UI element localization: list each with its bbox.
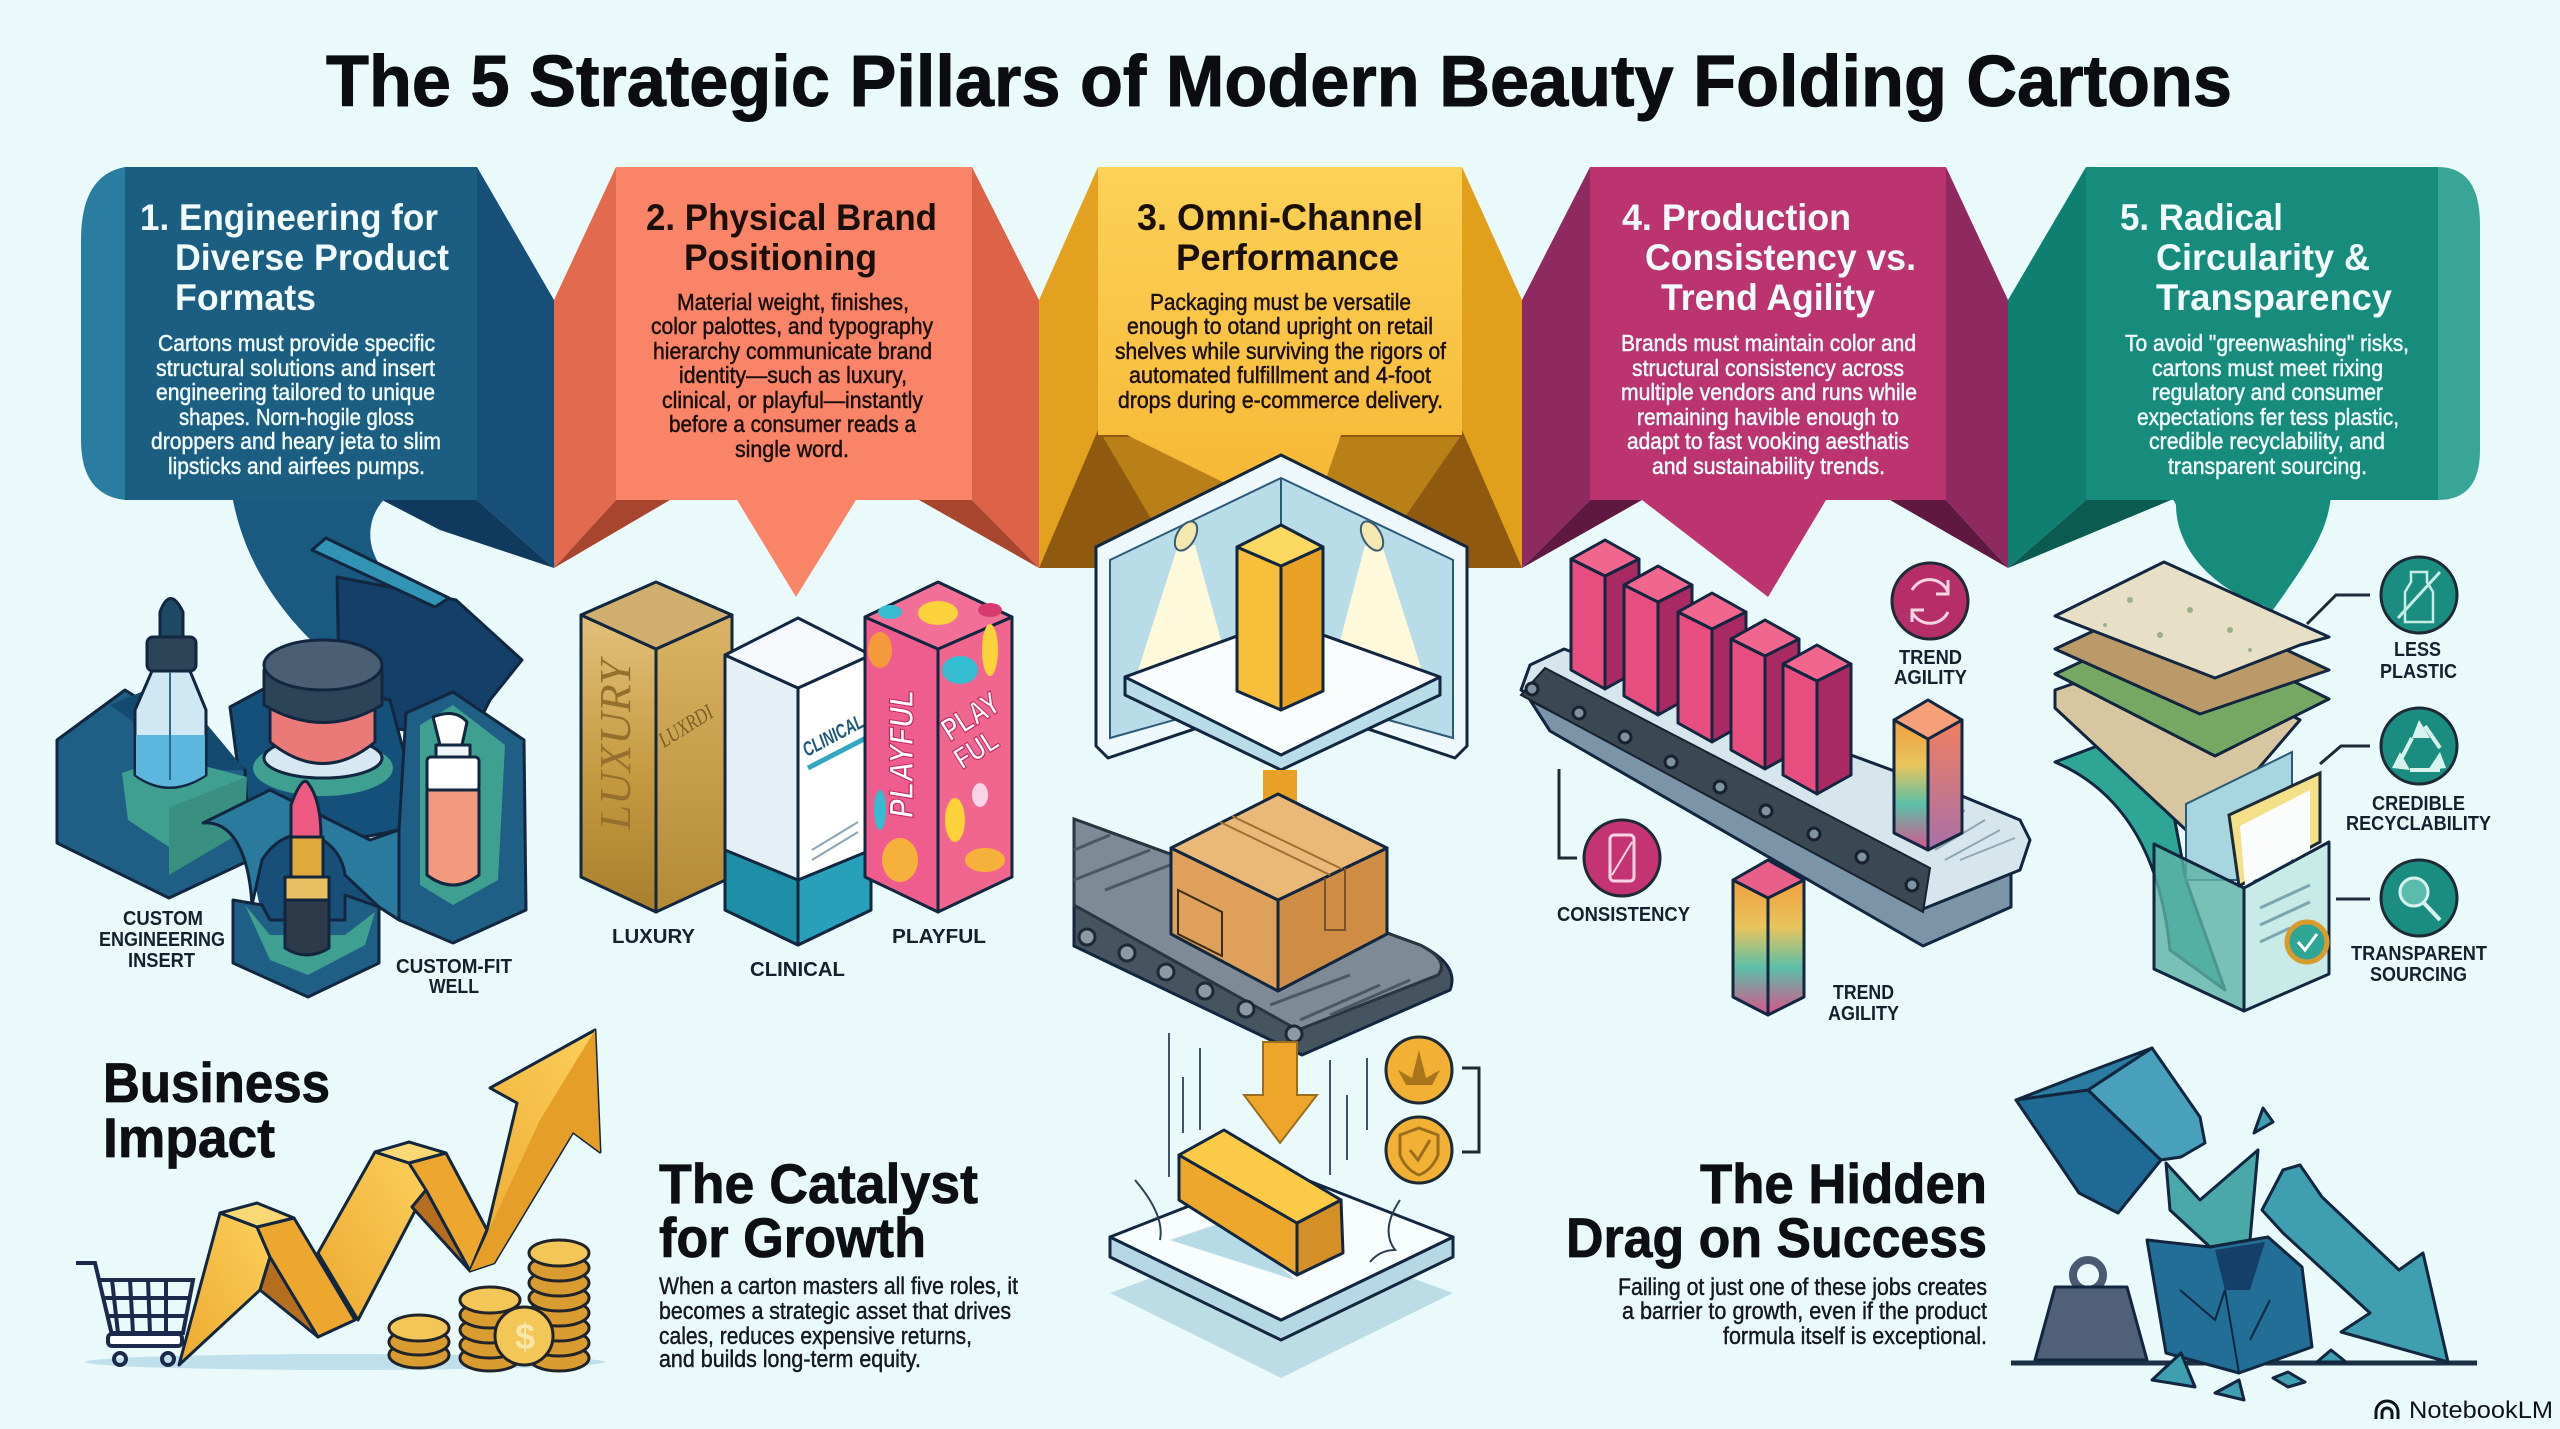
heading: the hidden drag on success: Drag on Success bbox=[1566, 1206, 1987, 1269]
gradient carton on belt bbox=[1894, 700, 1962, 850]
illustration: clinical box: CLINICAL bbox=[799, 711, 868, 761]
illustration: luxury box: LUXRDI bbox=[653, 699, 719, 753]
panel: pillar 4 production consistency: Trend Agility bbox=[1661, 277, 1875, 318]
label: trend agility bottom: TREND bbox=[1833, 982, 1894, 1004]
text block: catalyst description bbox=[659, 1273, 1018, 1373]
panel: pillar 2 brand positioning bbox=[554, 167, 1039, 597]
label: less plastic bbox=[2380, 639, 2457, 683]
panel: pillar 5 radical circularity: Transparency bbox=[2156, 277, 2392, 318]
text block: catalyst description: When a carton masters all five roles, it bbox=[659, 1273, 1018, 1300]
label: custom-fit well bbox=[396, 956, 512, 998]
panel: pillar 3 omni-channel: enough to otand upright on retail bbox=[1127, 313, 1433, 339]
text block: hidden drag description: Failing ot just one of these jobs creates bbox=[1618, 1274, 1987, 1301]
panel: pillar 1 engineering: Cartons must provide specific bbox=[158, 330, 435, 356]
panel: pillar 5 radical circularity: 5. Radical bbox=[2120, 197, 2283, 238]
label: custom engineering insert: ENGINEERING bbox=[99, 929, 225, 951]
panel: pillar 1 engineering: engineering tailored to unique bbox=[156, 379, 435, 405]
heading: the hidden drag on success bbox=[1566, 1152, 1987, 1269]
icon: coin stacks bbox=[389, 1240, 589, 1371]
label: consistency: CONSISTENCY bbox=[1557, 904, 1691, 926]
label: transparent sourcing bbox=[2351, 943, 2487, 986]
labels: box styles: CLINICAL bbox=[750, 959, 845, 981]
illustration: playful box: PLAYFUL bbox=[883, 690, 921, 818]
panel: pillar 3 omni-channel: 3. Omni-Channel bbox=[1137, 197, 1423, 238]
panel: pillar 1 engineering: structural solutions and insert bbox=[156, 355, 435, 381]
icon: trend agility badge bbox=[1892, 563, 1968, 639]
panel: pillar 2 brand positioning: identity—such as luxury, bbox=[679, 362, 907, 388]
icon: weight bbox=[2035, 1260, 2147, 1360]
icon: recyclability badge bbox=[2320, 708, 2457, 784]
illustration: consistency conveyor with pink cartons bbox=[1521, 540, 2030, 946]
panel: pillar 2 brand positioning: before a consumer reads a bbox=[669, 411, 917, 437]
label: custom-fit well: CUSTOM-FIT bbox=[396, 956, 512, 978]
panel: pillar 1 engineering: lipsticks and airfees pumps. bbox=[168, 453, 425, 479]
panel: pillar 2 brand positioning: single word. bbox=[735, 436, 849, 462]
illustration: material layers and transparency folder bbox=[2055, 562, 2329, 1011]
panel: pillar 3 omni-channel: shelves while surviving the rigors of bbox=[1115, 338, 1446, 364]
panel: pillar 4 production consistency bbox=[1522, 167, 2008, 597]
panel: pillar 5 radical circularity: transparent sourcing. bbox=[2168, 453, 2367, 479]
label: credible recyclability: CREDIBLE bbox=[2372, 793, 2465, 815]
heading: the catalyst for growth: The Catalyst bbox=[659, 1152, 978, 1215]
panel: pillar 1 engineering: droppers and heary jeta to slim bbox=[151, 428, 441, 454]
label: trend agility top: TREND bbox=[1899, 647, 1962, 669]
label: custom-fit well: WELL bbox=[429, 976, 479, 998]
illustration: broken arrow and weight bbox=[2011, 1048, 2477, 1400]
heading: business impact bbox=[103, 1051, 330, 1169]
title: The 5 Strategic Pillars of Modern Beauty Folding Cartons bbox=[326, 42, 2232, 122]
panel: pillar 4 production consistency: adapt to fast vooking aesthatis bbox=[1627, 428, 1909, 454]
illustration: growth arrow with cart and coins: $ bbox=[515, 1316, 535, 1357]
panel: pillar 5 radical circularity bbox=[2008, 167, 2480, 610]
illustration: luxury box: LUXURY bbox=[591, 655, 640, 831]
icon: dropper bottle bbox=[135, 598, 206, 788]
panel: pillar 1 engineering bbox=[81, 167, 554, 665]
panel: pillar 4 production consistency: and sustainability trends. bbox=[1652, 453, 1885, 479]
panel: pillar 5 radical circularity: expectations fer tess plastic, bbox=[2137, 404, 2399, 430]
panel: pillar 3 omni-channel: Performance bbox=[1176, 237, 1399, 278]
labels: box styles: PLAYFUL bbox=[892, 926, 986, 948]
label: custom engineering insert bbox=[99, 908, 225, 972]
label: credible recyclability: RECYCLABILITY bbox=[2346, 813, 2492, 835]
panel: pillar 3 omni-channel bbox=[1039, 167, 1522, 568]
icon: pump bottle bbox=[427, 713, 479, 885]
illustration: playful box: PLAY bbox=[935, 685, 1006, 748]
label: custom engineering insert: INSERT bbox=[128, 950, 195, 972]
panel: pillar 5 radical circularity: Circularity & bbox=[2156, 237, 2370, 278]
illustration: gradient carton bbox=[1733, 860, 1804, 1015]
panel: pillar 4 production consistency: structural consistency across bbox=[1632, 355, 1904, 381]
labels: box styles: LUXURY bbox=[612, 926, 696, 948]
icon: transparent sourcing badge bbox=[2336, 860, 2457, 936]
panel: pillar 4 production consistency: remaining havible enough to bbox=[1637, 404, 1899, 430]
icon: shopping cart bbox=[76, 1263, 193, 1365]
icon: cream jar bbox=[264, 640, 382, 778]
text block: hidden drag description bbox=[1618, 1274, 1987, 1350]
label: custom engineering insert: CUSTOM bbox=[123, 908, 203, 930]
label: trend agility bottom bbox=[1828, 982, 1900, 1025]
panel: pillar 4 production consistency: Consistency vs. bbox=[1645, 237, 1916, 278]
panel: pillar 5 radical circularity: To avoid "greenwashing" risks, bbox=[2125, 330, 2409, 356]
heading: business impact: Impact bbox=[103, 1106, 275, 1169]
panel: pillar 2 brand positioning: color palottes, and typography bbox=[651, 313, 933, 339]
panel: pillar 1 engineering: 1. Engineering for bbox=[140, 197, 438, 238]
arch insert backing bbox=[250, 800, 380, 955]
label: less plastic: LESS bbox=[2394, 639, 2441, 661]
panel: pillar 1 engineering: Diverse Product bbox=[175, 237, 449, 278]
arch insert bbox=[203, 790, 399, 920]
text block: catalyst description: becomes a strategic asset that drives bbox=[659, 1298, 1011, 1325]
speed lines bbox=[1169, 1033, 1367, 1177]
illustration: playful box: FUL bbox=[948, 724, 1005, 776]
panel: pillar 2 brand positioning: Positioning bbox=[684, 237, 877, 278]
illustration: drop test platform bbox=[1110, 1130, 1453, 1378]
heading: the hidden drag on success: The Hidden bbox=[1700, 1152, 1987, 1215]
heading: the catalyst for growth: for Growth bbox=[659, 1206, 926, 1269]
panel: pillar 2 brand positioning: hierarchy communicate brand bbox=[653, 338, 932, 364]
label: trend agility top bbox=[1894, 647, 1968, 689]
illustration: clinical box bbox=[725, 618, 871, 945]
label: trend agility top: AGILITY bbox=[1894, 667, 1968, 689]
heading: business impact: Business bbox=[103, 1051, 330, 1114]
panel: pillar 4 production consistency: Brands must maintain color and bbox=[1621, 330, 1916, 356]
panel: pillar 3 omni-channel: automated fulfillment and 4-foot bbox=[1129, 362, 1431, 388]
illustration: conveyor with shipping box bbox=[1074, 794, 1452, 1055]
panel: pillar 5 radical circularity: credible recyclability, and bbox=[2149, 428, 2385, 454]
panel: pillar 5 radical circularity: cartons must meet rixing bbox=[2152, 355, 2383, 381]
logo: NotebookLM: NotebookLM bbox=[2409, 1397, 2553, 1424]
text block: catalyst description: and builds long-term equity. bbox=[659, 1346, 921, 1373]
panel: pillar 3 omni-channel: drops during e-commerce delivery. bbox=[1118, 387, 1443, 413]
illustration: luxury box bbox=[581, 582, 732, 912]
panel: pillar 5 radical circularity: regulatory and consumer bbox=[2152, 379, 2383, 405]
label: transparent sourcing: TRANSPARENT bbox=[2351, 943, 2487, 965]
icon: consistency badge bbox=[1559, 769, 1660, 896]
label: less plastic: PLASTIC bbox=[2380, 661, 2457, 683]
panel: pillar 2 brand positioning: clinical, or playful—instantly bbox=[662, 387, 923, 413]
illustration: growth arrow with cart and coins bbox=[76, 1030, 605, 1371]
panel: pillar 3 omni-channel: Packaging must be versatile bbox=[1150, 289, 1411, 315]
arrow: connector shelf to parcel bbox=[1263, 770, 1297, 802]
illustration: custom insert with cosmetics bbox=[57, 538, 526, 997]
label: trend agility bottom: AGILITY bbox=[1828, 1003, 1900, 1025]
arrow: rising zigzag bbox=[179, 1030, 600, 1365]
panel: pillar 4 production consistency: multiple vendors and runs while bbox=[1621, 379, 1917, 405]
heading: the catalyst for growth bbox=[659, 1152, 978, 1269]
label: credible recyclability bbox=[2346, 793, 2492, 835]
text block: hidden drag description: formula itself is exceptional. bbox=[1723, 1323, 1987, 1350]
panel: pillar 4 production consistency: 4. Production bbox=[1622, 197, 1851, 238]
panel: pillar 1 engineering: shapes. Norn-hogile gloss bbox=[179, 404, 414, 430]
illustration: retail shelf display bbox=[1096, 455, 1467, 770]
text block: catalyst description: cales, reduces expensive returns, bbox=[659, 1323, 972, 1350]
panel: pillar 1 engineering: Formats bbox=[175, 277, 316, 318]
panel: pillar 2 brand positioning: Material weight, finishes, bbox=[677, 289, 909, 315]
text block: hidden drag description: a barrier to growth, even if the product bbox=[1622, 1298, 1987, 1325]
panel: pillar 2 brand positioning: 2. Physical Brand bbox=[646, 197, 937, 238]
labels: box styles bbox=[612, 926, 986, 981]
icon: lipstick bbox=[285, 781, 329, 955]
arrow: drop arrow bbox=[1244, 1042, 1317, 1143]
label: transparent sourcing: SOURCING bbox=[2370, 964, 2467, 986]
illustration: playful box bbox=[865, 582, 1012, 912]
icon: less plastic badge bbox=[2307, 557, 2457, 633]
pink carton row bbox=[1571, 540, 1851, 794]
icons: durability badges bbox=[1386, 1037, 1479, 1183]
